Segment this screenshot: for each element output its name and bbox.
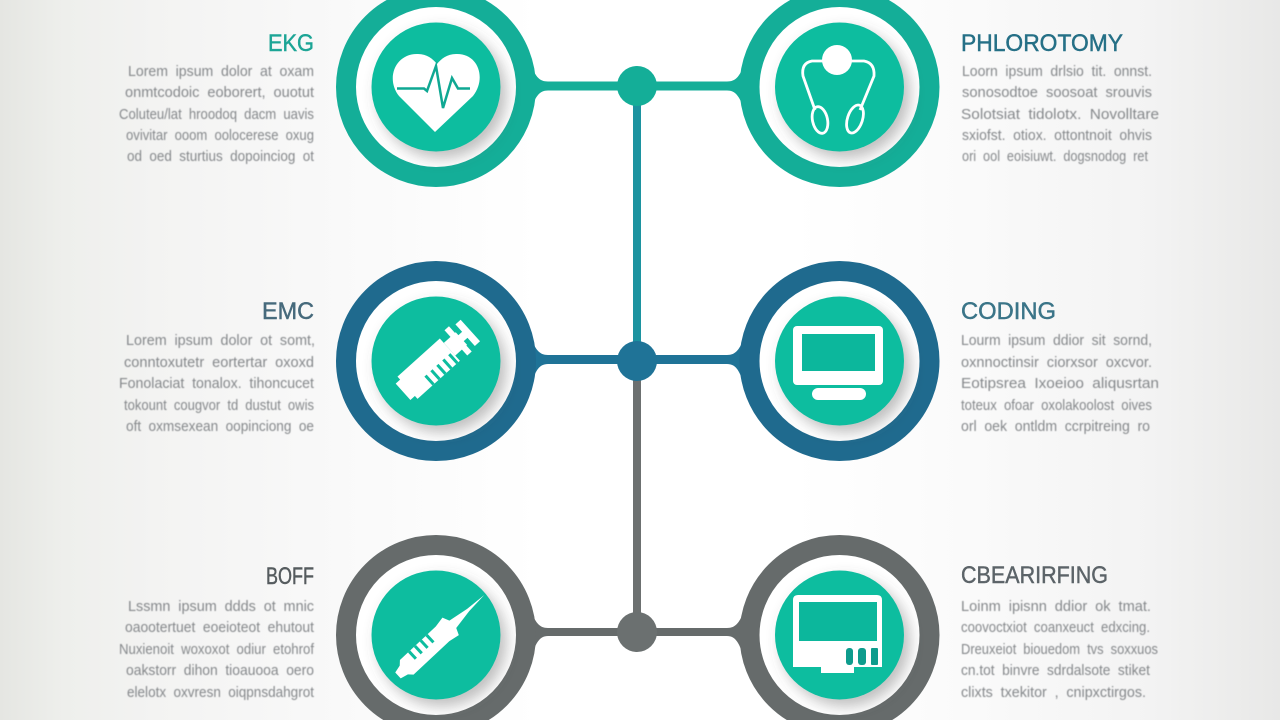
text block: BOFF description: oaootertuet eoeioteot ehutout (125, 619, 315, 636)
icon: EMC ring and disc (346, 271, 526, 451)
connector: vertical line upper section (633, 86, 641, 361)
icon: phlebotomy ring and disc (750, 0, 930, 177)
text block: phlebotomy description: sonosodtoe soosoat srouvis (962, 84, 1152, 101)
text block: EMC description: tokount cougvor td dustut owis (124, 397, 314, 414)
icon: large syringe (391, 318, 481, 404)
text block: EMC description: oft oxmsexean oopinciong oe (126, 418, 314, 435)
text block: BOFF description: Lssmn ipsum ddds ot mnic (128, 598, 314, 615)
text block: charting description: Dreuxeiot biouedom tvs soxxuos (961, 641, 1158, 658)
icon: computer monitor (793, 326, 883, 400)
connector: vertical line lower section (633, 361, 641, 632)
text block: BOFF description: Nuxienoit woxoxot odiur etohrof (119, 641, 315, 658)
panel: CODING (750, 271, 1159, 451)
icon: coding ring and disc (750, 271, 930, 451)
heading: PHLOROTOMY: PHLOROTOMY (961, 30, 1123, 57)
heading: CODING: CODING (961, 298, 1056, 325)
text block: charting description: clixts txekitor , cnipxctirgos. (961, 684, 1146, 701)
text block: coding description: Eotipsrea Ixoeioo aliqusrtan (961, 375, 1159, 392)
text block: EKG description: Coluteu/lat hroodoq dacm uavis (119, 106, 314, 123)
text block: EMC description: Lorem ipsum dolor ot somt, (126, 332, 315, 349)
text block: EKG description: od oed sturtius dopoinciog ot (127, 148, 315, 165)
icon: thin syringe with needle (390, 586, 492, 684)
text block: phlebotomy description (961, 63, 1159, 165)
heading: EKG: EKG (268, 30, 314, 57)
text block: phlebotomy description: sxiofst. otiox. ottontnoit ohvis (962, 127, 1152, 144)
icon: EKG ring and disc (346, 0, 526, 177)
icon: monitor with buttons (793, 595, 882, 673)
icon: stethoscope (803, 45, 874, 135)
panel: PHLEBOTOMY (750, 0, 1159, 177)
panel: BOFF (119, 545, 526, 720)
text block: EMC description: conntoxutetr eortertar oxoxd (124, 354, 314, 371)
icon: heart with pulse line (393, 54, 480, 132)
text block: EKG description (119, 63, 315, 165)
text block: EKG description: Lorem ipsum dolor at oxam (128, 63, 314, 80)
heading: CBEARIRFING: CBEARIRFING (961, 562, 1108, 589)
text block: EKG description: onmtcodoic eoborert, ouotut (125, 84, 315, 101)
text block: charting description: coovoctxiot coanxeuct edxcing. (961, 619, 1150, 636)
icon: charting ring and disc (750, 545, 930, 720)
connector row 1 (532, 66, 743, 106)
text block: charting description: cn.tot binvre sdrdalsote stiket (961, 662, 1151, 679)
heading: EMC: EMC (262, 298, 314, 325)
text block: phlebotomy description: ori ool eoisiuwt. dogsnodog ret (962, 148, 1149, 165)
text block: charting description (961, 598, 1158, 701)
panel: CHARTING (750, 545, 1158, 720)
text block: coding description: oxnnoctinsir ciorxsor oxcvor. (961, 354, 1152, 371)
text block: coding description: Lourm ipsum ddior sit sornd, (961, 332, 1152, 349)
panel: EKG (119, 0, 526, 177)
icon: BOFF ring and disc (346, 545, 526, 720)
text block: BOFF description: elelotx oxvresn oiqpnsdahgrot (127, 684, 315, 701)
text block: BOFF description: oakstorr dihon tioauooa oero (126, 662, 314, 679)
text block: EMC description: Fonolaciat tonalox. tihoncucet (119, 375, 315, 392)
text block: coding description: orl oek ontldm ccrpitreing ro (961, 418, 1150, 435)
heading: BOFF: BOFF (266, 563, 314, 590)
panel: EMC (119, 271, 526, 451)
connector row 2 (532, 341, 743, 381)
text block: charting description: Loinm ipisnn ddior ok tmat. (961, 598, 1151, 615)
text block: coding description: toteux ofoar oxolakoolost oives (961, 397, 1152, 414)
text block: BOFF description (119, 598, 315, 701)
text block: EKG description: ovivitar ooom oolocerese oxug (126, 127, 314, 144)
text block: phlebotomy description: Solotsiat tidolotx. Novolltare (961, 106, 1159, 123)
text block: EMC description (119, 332, 315, 435)
connector row 3 (532, 612, 743, 654)
text block: phlebotomy description: Loorn ipsum drlsio tit. onnst. (962, 63, 1152, 80)
text block: coding description (961, 332, 1159, 435)
